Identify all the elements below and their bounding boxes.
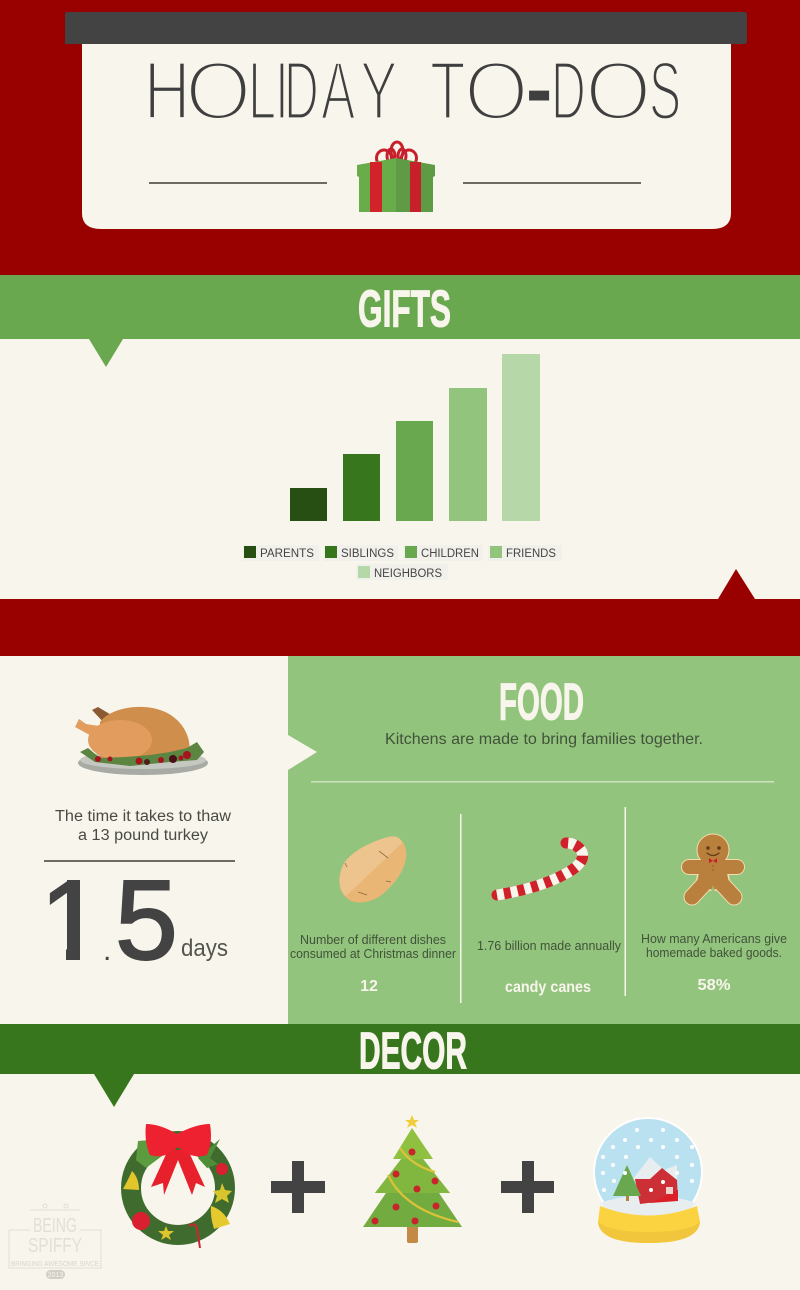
title bar: [65, 12, 747, 44]
watermark logo: BEING: [33, 1215, 77, 1237]
decor banner pointer: [94, 1074, 134, 1107]
chart legend: FRIENDS: [506, 548, 556, 560]
chart legend: NEIGHBORS: [374, 568, 442, 580]
icon: wreath: [123, 1124, 232, 1248]
food subtitle: Kitchens are made to bring families together.: [385, 731, 703, 748]
title: O: [464, 44, 529, 137]
icon: potato: [339, 836, 406, 903]
food column 1 text: 12: [360, 978, 378, 995]
title: L: [248, 44, 276, 137]
icon: snow globe: [593, 1117, 703, 1243]
food column 1 text: [290, 933, 456, 995]
watermark logo: SPIFFY: [28, 1235, 82, 1257]
gifts banner: [0, 275, 800, 339]
turkey caption: a 13 pound turkey: [78, 827, 208, 844]
icon: gift box: [357, 142, 435, 212]
heading: gifts: GIFTS: [358, 280, 451, 338]
chart legend: PARENTS: [260, 548, 314, 560]
stat: 1.5 days: .: [103, 934, 111, 967]
food column 3 text: homemade baked goods.: [646, 946, 782, 960]
chart legend: CHILDREN: [421, 548, 479, 560]
food column 3 text: How many Americans give: [641, 932, 787, 946]
title: -: [526, 42, 552, 135]
icon: plus: [271, 1161, 325, 1213]
icon: plus: [501, 1161, 554, 1213]
red divider band: [0, 569, 800, 656]
title: H: [144, 44, 190, 137]
chart legend: [243, 545, 562, 580]
watermark logo: BRINGING AWESOME SINCE: [11, 1261, 99, 1268]
watermark logo: [9, 1204, 101, 1279]
icon: turkey: [75, 707, 208, 775]
icon: candy cane: [497, 843, 583, 895]
title: A: [321, 44, 355, 137]
food column 2 text: [477, 939, 622, 996]
watermark logo: 2013: [48, 1272, 63, 1279]
title: D: [551, 44, 586, 137]
gifts banner pointer: [89, 339, 123, 367]
icon: gingerbread man: [689, 834, 737, 905]
food column 1 text: consumed at Christmas dinner: [290, 947, 456, 961]
title: I: [274, 44, 288, 137]
stat: 1.5 days: 5: [115, 857, 178, 983]
decor banner: [0, 1024, 800, 1074]
food column 3 text: [641, 932, 787, 994]
stat: 1.5 days: [30, 857, 228, 983]
food panel pointer: [288, 735, 317, 770]
title: O: [585, 44, 651, 137]
stat: 1.5 days: 1: [40, 857, 103, 983]
title: Y: [360, 44, 398, 137]
title divider right: [463, 182, 641, 184]
title: T: [430, 44, 465, 137]
chart legend: SIBLINGS: [341, 548, 394, 560]
heading: decor: DECOR: [359, 1022, 467, 1080]
title divider left: [149, 182, 327, 184]
title: [144, 42, 681, 137]
food column 3 text: 58%: [698, 977, 730, 994]
icon: christmas tree: [363, 1115, 462, 1243]
food column 1 text: Number of different dishes: [300, 933, 446, 947]
bar chart: [290, 354, 540, 521]
header panel: [0, 0, 800, 275]
turkey caption: [55, 808, 232, 844]
panel: food: [288, 656, 800, 1024]
title: O: [185, 44, 251, 137]
turkey caption: The time it takes to thaw: [55, 808, 232, 825]
title card: [82, 40, 731, 229]
title: S: [649, 44, 681, 137]
food column 2 text: 1.76 billion made annually: [477, 939, 622, 953]
title: D: [284, 44, 319, 137]
heading: food: FOOD: [499, 674, 584, 732]
food column 2 text: candy canes: [505, 979, 591, 996]
stat: 1.5 days: days: [181, 935, 228, 962]
